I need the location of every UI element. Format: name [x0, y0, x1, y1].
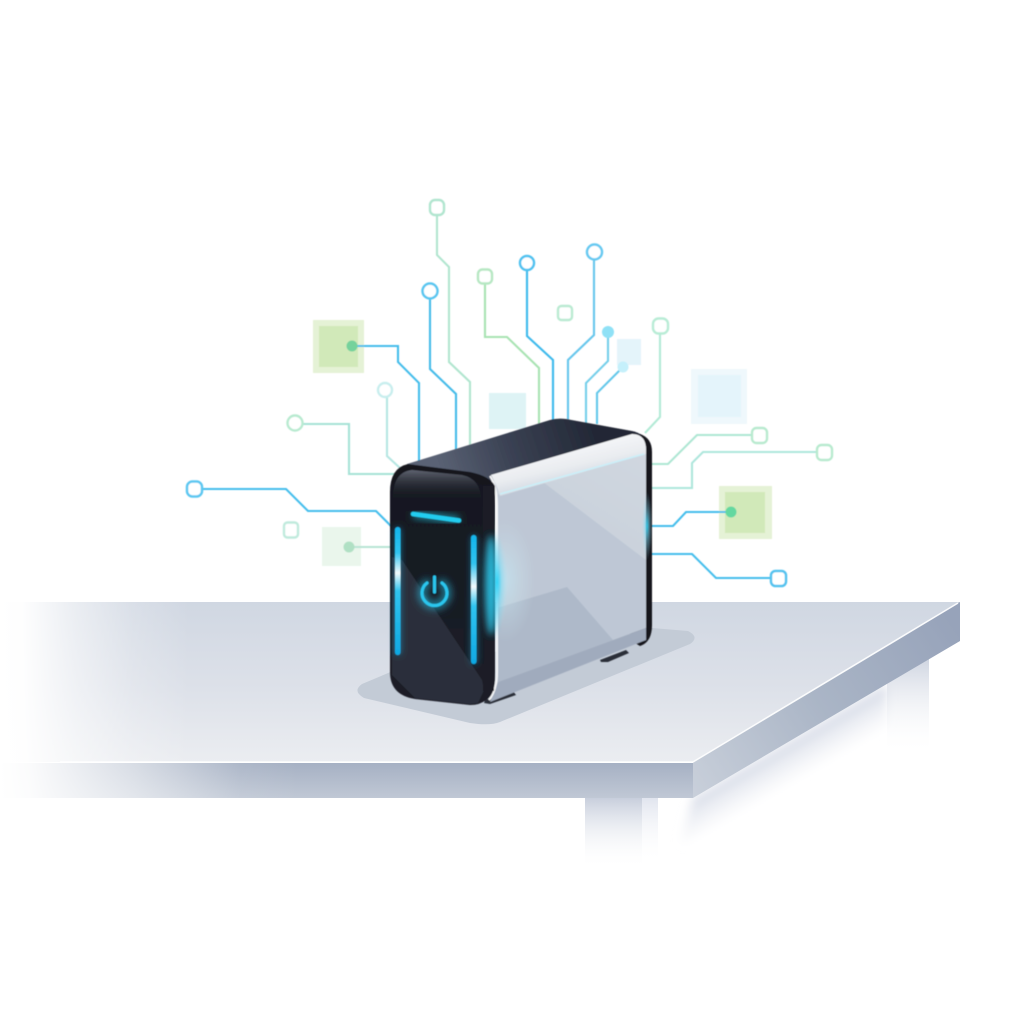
- status bar: [413, 514, 459, 520]
- green square: upper left: [313, 320, 364, 373]
- desk: [0, 600, 960, 869]
- desk top surface: [0, 602, 960, 762]
- node: small green square left: [284, 522, 298, 538]
- icon: power symbol: [422, 577, 447, 606]
- panel bottom shade: [490, 628, 646, 702]
- panel reflection: lower facet: [497, 587, 613, 682]
- trace: pale cyan dot: [597, 362, 628, 424]
- server feet: [484, 650, 629, 704]
- trace: right green up: [645, 318, 668, 433]
- trace: top green: [430, 200, 470, 445]
- trace: lower left green dot: [344, 542, 391, 552]
- server side panel: [489, 434, 646, 702]
- green square: right: [719, 486, 772, 539]
- server front: [390, 464, 497, 705]
- trace: right green long: [650, 445, 832, 488]
- trace: pale teal circle: [378, 383, 400, 468]
- desk right edge: [693, 602, 960, 798]
- server glow left of panel: [486, 534, 508, 630]
- server right edge: [630, 434, 652, 646]
- server contact shadow: [488, 628, 648, 700]
- trace: blue upper left: [422, 284, 456, 450]
- pale blue square: small: [617, 339, 641, 365]
- desk underside shadow: [680, 684, 887, 845]
- panel bright band: [491, 434, 646, 496]
- server: [390, 419, 652, 705]
- node: small green square top: [558, 306, 572, 320]
- desk front edge: [0, 763, 693, 798]
- front bevel: [393, 470, 481, 505]
- desk front edge fade: [0, 762, 300, 800]
- front corner strip: [483, 486, 494, 691]
- trace: blue centre: [520, 256, 553, 422]
- trace: top centre green: [478, 270, 539, 424]
- left light bar: [395, 527, 401, 655]
- desk left fade: [0, 600, 190, 764]
- trace: long blue left: [187, 482, 391, 526]
- trace: blue lower right: [650, 554, 786, 586]
- trace: blue from green square: [346, 340, 419, 462]
- trace: blue to right green square: [650, 506, 736, 526]
- trace: right green short: [650, 428, 767, 464]
- right light bar: [471, 535, 477, 664]
- circuit network: [187, 200, 832, 586]
- panel reflection: middle facet: [497, 482, 646, 682]
- pale green square: lower left: [322, 527, 361, 566]
- server glow right edge: [642, 492, 652, 560]
- front body: [390, 464, 495, 705]
- trace: left green: [288, 416, 395, 474]
- teal square: [489, 393, 526, 429]
- trace: cyan dot: [586, 326, 614, 424]
- desk legs: [585, 650, 929, 869]
- panel cyan sheen: [500, 454, 644, 494]
- panel base: [489, 435, 646, 700]
- blue glow along front corner: [485, 535, 497, 635]
- trace: blue centre right: [568, 244, 602, 420]
- panel wide soft glow: [475, 518, 535, 642]
- server shadow on desk: [357, 627, 695, 724]
- front lower facet: [392, 557, 484, 704]
- pale blue square: large: [691, 369, 747, 424]
- desk edge highlight: [60, 603, 958, 762]
- server top: [405, 419, 647, 482]
- panel white edge: [489, 476, 497, 700]
